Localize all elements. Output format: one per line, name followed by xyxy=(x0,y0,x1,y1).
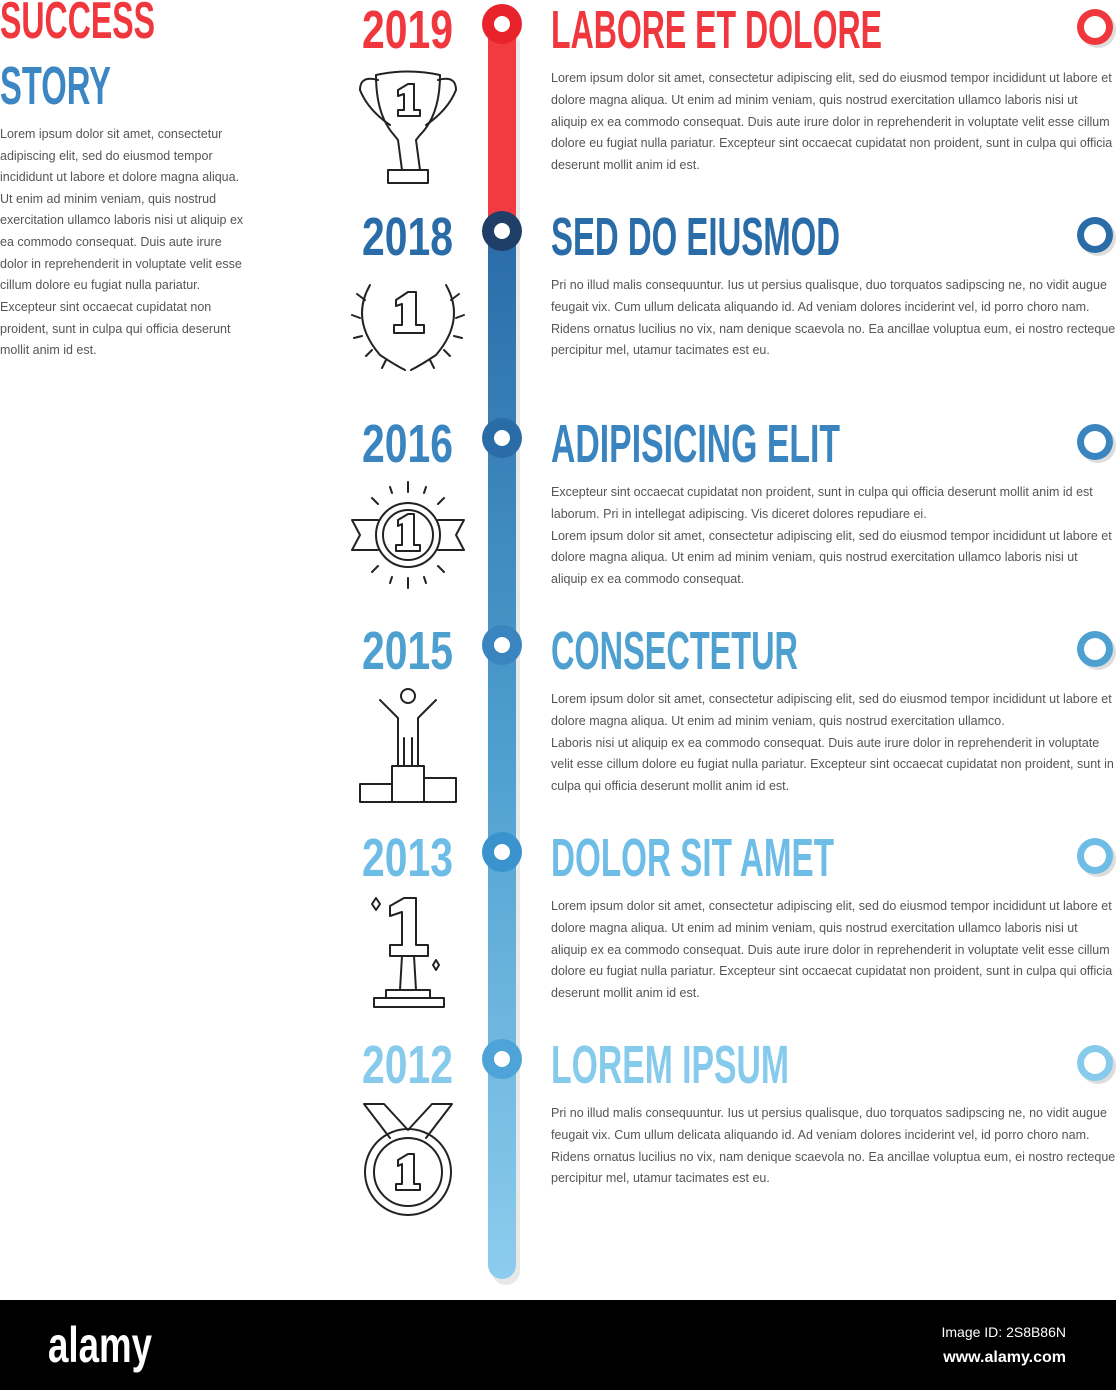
section 2018: percipitur mel, utamur tacimates est eu. xyxy=(551,343,770,357)
intro text: proident, sunt in culpa qui officia deserunt xyxy=(0,322,231,336)
section 2018: Ridens ornatus lucilius no vix, nam denique scaevola no. Ea ancillae voluptua eum, ei nostro recteque xyxy=(551,322,1115,336)
icon: number one statue xyxy=(372,898,444,1007)
section 2019 xyxy=(360,0,1112,183)
section 2015: dolore magna aliqua. Ut enim ad minim veniam, quis nostrud exercitation ullamco. xyxy=(551,714,1005,728)
section 2016: Lorem ipsum dolor sit amet, consectetur adipiscing elit, sed do eiusmod tempor incididunt ut labore et xyxy=(551,529,1112,543)
section 2018: 2018 xyxy=(362,207,453,267)
section 2016: aliquip ex ea commodo consequat. xyxy=(551,572,744,586)
section 2016: 2016 xyxy=(362,414,453,474)
intro text: incididunt ut labore et dolore magna aliqua. xyxy=(0,170,239,184)
section 2016: dolore magna aliqua. Ut enim ad minim veniam, quis nostrud exercitation ullamco laboris nisi ut xyxy=(551,550,1078,564)
intro text: ea commodo consequat. Duis aute irure xyxy=(0,235,222,249)
section 2012: Ridens ornatus lucilius no vix, nam denique scaevola no. Ea ancillae voluptua eum, ei nostro recteque xyxy=(551,1150,1115,1164)
section 2012: percipitur mel, utamur tacimates est eu. xyxy=(551,1171,770,1185)
section 2013: dolore eu fugiat nulla pariatur. Excepteur sint occaecat cupidatat non proident, sunt in culpa qui officia xyxy=(551,964,1112,978)
intro text: dolor in reprehenderit in voluptate velit esse xyxy=(0,257,242,271)
section 2015 xyxy=(360,621,1114,802)
section 2012: Pri no illud malis consequuntur. Ius ut persius qualisque, duo torquatos sadipscing ne, no vidit augue xyxy=(551,1106,1107,1120)
title xyxy=(0,0,155,116)
section 2015: velit esse cillum dolore eu fugiat nulla pariatur. Excepteur sint occaecat cupidatat non proident, sunt in xyxy=(551,757,1114,771)
icon: trophy xyxy=(360,72,456,183)
section 2012: 2012 xyxy=(362,1035,453,1095)
intro text: exercitation ullamco laboris nisi ut aliquip ex xyxy=(0,213,244,227)
section 2018 xyxy=(352,207,1115,370)
section 2019: LABORE ET DOLORE xyxy=(551,0,882,60)
section 2012 xyxy=(362,1035,1115,1215)
section 2019: aliquip ex ea commodo consequat. Duis aute irure dolor in reprehenderit in voluptate velit esse cillum xyxy=(551,115,1110,129)
right markers xyxy=(1077,9,1116,1084)
section 2019: 2019 xyxy=(362,0,453,60)
section 2016: Excepteur sint occaecat cupidatat non proident, sunt in culpa qui officia deserunt mollit anim id est xyxy=(551,485,1093,499)
section 2015: Laboris nisi ut aliquip ex ea commodo consequat. Duis aute irure dolor in reprehenderit in voluptate xyxy=(551,736,1099,750)
intro text: Lorem ipsum dolor sit amet, consectetur xyxy=(0,127,222,141)
section 2019: deserunt mollit anim id est. xyxy=(551,158,700,172)
title: STORY xyxy=(0,56,111,116)
intro text: Ut enim ad minim veniam, quis nostrud xyxy=(0,192,216,206)
icon: laurel xyxy=(352,285,464,370)
section 2016 xyxy=(352,414,1112,588)
section 2015: culpa qui officia deserunt mollit anim id est. xyxy=(551,779,789,793)
footer bar xyxy=(0,1300,1116,1390)
footer bar: Image ID: 2S8B86N xyxy=(941,1324,1066,1340)
section 2013: Lorem ipsum dolor sit amet, consectetur adipiscing elit, sed do eiusmod tempor incididunt ut labore et xyxy=(551,899,1112,913)
intro text xyxy=(0,127,244,357)
section 2012: LOREM IPSUM xyxy=(551,1035,789,1095)
section 2013: deserunt mollit anim id est. xyxy=(551,986,700,1000)
icon: podium xyxy=(360,689,456,802)
section 2015: CONSECTETUR xyxy=(551,621,798,681)
intro text: mollit anim id est. xyxy=(0,343,97,357)
icon: medal xyxy=(364,1104,452,1215)
section 2018: SED DO EIUSMOD xyxy=(551,207,840,267)
intro text: cillum dolore eu fugiat nulla pariatur. xyxy=(0,278,200,292)
nodes xyxy=(482,4,522,1079)
footer bar: www.alamy.com xyxy=(942,1349,1066,1366)
intro text: Excepteur sint occaecat cupidatat non xyxy=(0,300,211,314)
section 2019: dolore magna aliqua. Ut enim ad minim veniam, quis nostrud exercitation ullamco laboris nisi ut xyxy=(551,93,1078,107)
section 2016: ADIPISICING ELIT xyxy=(551,414,840,474)
section 2013: 2013 xyxy=(362,828,453,888)
section 2015: 2015 xyxy=(362,621,453,681)
timeline bar xyxy=(488,22,520,1285)
section 2013: aliquip ex ea commodo consequat. Duis aute irure dolor in reprehenderit in voluptate velit esse cillum xyxy=(551,943,1110,957)
footer bar: alamy xyxy=(48,1317,152,1373)
section 2015: Lorem ipsum dolor sit amet, consectetur adipiscing elit, sed do eiusmod tempor incididunt ut labore et xyxy=(551,692,1112,706)
section 2018: feugait vix. Cum ullum delicata aliquando id. Ad veniam dolores inciderint vel, id porro choro nam. xyxy=(551,300,1089,314)
section 2019: Lorem ipsum dolor sit amet, consectetur adipiscing elit, sed do eiusmod tempor incididunt ut labore et xyxy=(551,71,1112,85)
section 2019: dolore eu fugiat nulla pariatur. Excepteur sint occaecat cupidatat non proident, sunt in culpa qui officia xyxy=(551,136,1112,150)
section 2016: laborum. Pri in intellegat adipiscing. Vis diceret dolores repudiare ei. xyxy=(551,507,927,521)
section 2018: Pri no illud malis consequuntur. Ius ut persius qualisque, duo torquatos sadipscing ne, no vidit augue xyxy=(551,278,1107,292)
icon: rosette xyxy=(352,482,464,588)
section 2013: dolore magna aliqua. Ut enim ad minim veniam, quis nostrud exercitation ullamco laboris nisi ut xyxy=(551,921,1078,935)
section 2012: feugait vix. Cum ullum delicata aliquando id. Ad veniam dolores inciderint vel, id porro choro nam. xyxy=(551,1128,1089,1142)
section 2013: DOLOR SIT AMET xyxy=(551,828,834,888)
section 2013 xyxy=(362,828,1112,1007)
intro text: adipiscing elit, sed do eiusmod tempor xyxy=(0,149,213,163)
